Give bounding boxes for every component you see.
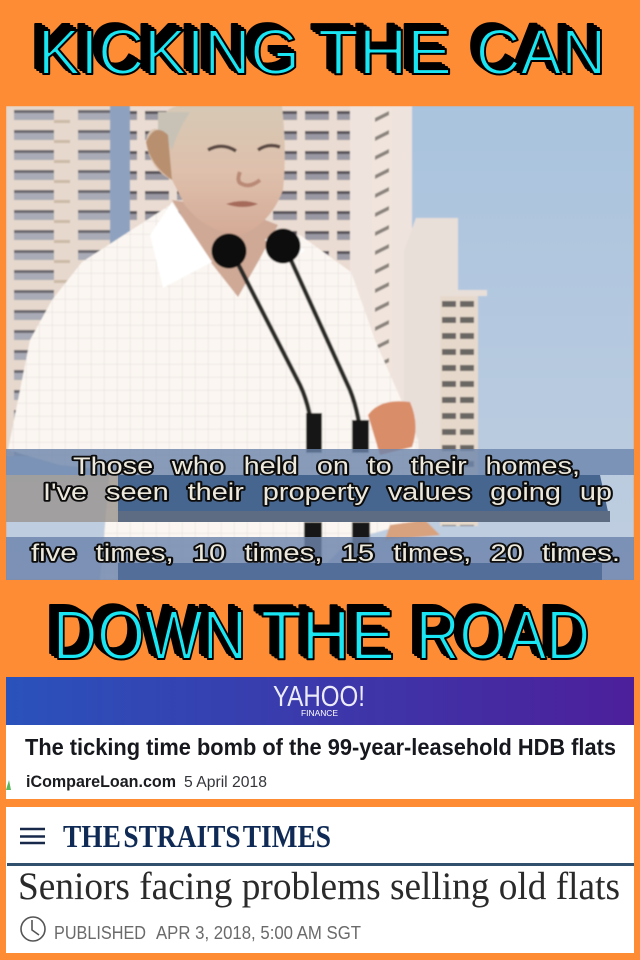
- caption text: Those who held on to their homes,: [73, 453, 580, 480]
- Yahoo header band: [6, 677, 634, 725]
- neck: [172, 200, 278, 297]
- title: Kicking the Can: CAN: [476, 16, 606, 88]
- caption text: I've seen their property values going up: [43, 479, 612, 506]
- small building windows: [440, 296, 478, 526]
- photo: speaker at microphones with HDB model: [6, 106, 634, 580]
- subtitle: Down the Road: [53, 596, 590, 674]
- masthead: THE STRAITS TIMES: [63, 818, 331, 854]
- icon: menu: [20, 829, 45, 843]
- headline: Seniors facing problems selling old flats: [18, 865, 620, 908]
- ear shading: [146, 130, 172, 180]
- subtitle: Down the Road: THE: [261, 596, 395, 674]
- subtitle: Down the Road: DOWN: [53, 596, 247, 674]
- title: Kicking the Can: THE: [318, 16, 452, 88]
- source and date: iCompareLoan.com: [26, 772, 176, 791]
- right hand: [368, 401, 416, 455]
- title: Kicking the Can: [38, 16, 606, 88]
- caption text: five times, 10 times, 15 times, 20 times.: [31, 540, 620, 567]
- publish date: [54, 923, 361, 943]
- caption text: [31, 453, 620, 567]
- headline: The ticking time bomb of the 99-year-leasehold HDB flats: [25, 734, 616, 760]
- panel: Straits Times article: [6, 807, 634, 953]
- middle building: [129, 106, 351, 271]
- title: Kicking the Can: KICKING: [38, 16, 300, 88]
- microphone heads: [212, 234, 246, 268]
- caption band darker: [118, 475, 608, 511]
- source and date: 5 April 2018: [184, 774, 267, 791]
- sky backdrop: [6, 106, 634, 580]
- card: [6, 807, 634, 953]
- white tower: [348, 106, 413, 402]
- small building: [412, 217, 488, 475]
- source and date: [26, 772, 267, 791]
- caption band upper: [6, 449, 634, 475]
- panel: Yahoo Finance article: [6, 677, 634, 799]
- Yahoo logo: YAHOO!: [273, 681, 365, 713]
- subtitle: Down the Road: ROAD: [416, 596, 590, 674]
- gap between buildings: [109, 106, 131, 244]
- publish date: PUBLISHED: [54, 923, 146, 943]
- shirt: [8, 205, 420, 580]
- article card: [6, 725, 634, 799]
- publish date: APR 3, 2018, 5:00 AM SGT: [156, 923, 361, 943]
- microphone stems: [236, 259, 362, 422]
- hair: [158, 112, 190, 150]
- eyes and mouth: [208, 146, 280, 151]
- left building: [6, 106, 111, 456]
- Yahoo logo: FINANCE: [301, 708, 338, 718]
- head: [146, 106, 286, 220]
- caption band lower: [6, 537, 634, 580]
- icon: clock: [21, 917, 45, 941]
- collar: [150, 202, 305, 288]
